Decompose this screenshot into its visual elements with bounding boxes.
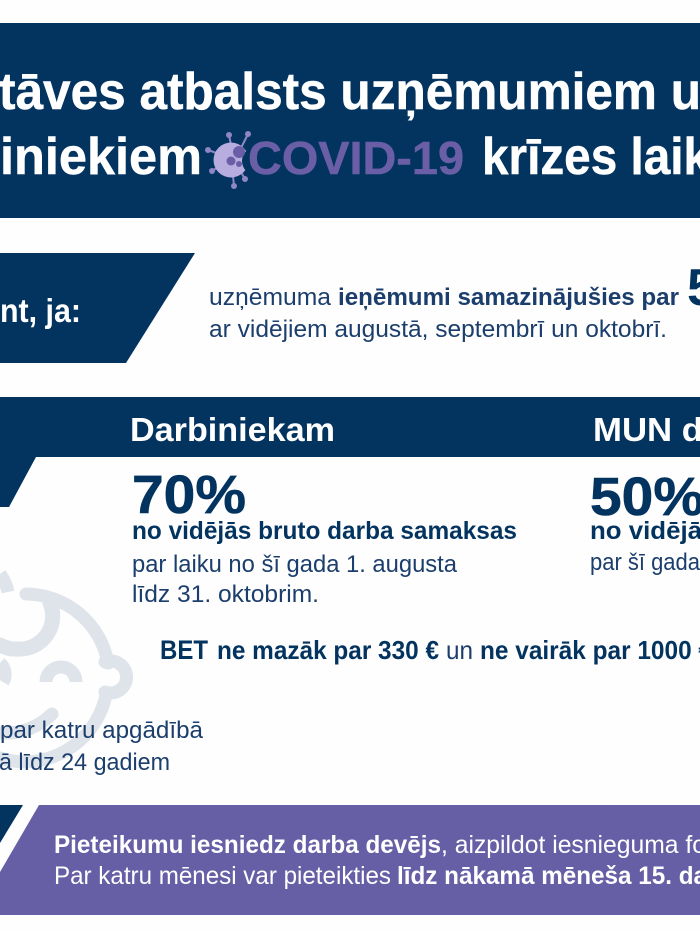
apply line 1 bold: Pieteikumu iesniedz darba devējs <box>54 831 441 859</box>
panel: support amounts <box>0 397 700 665</box>
condition text line 2: ar vidējiem augustā, septembrī un oktobrī. <box>209 316 667 343</box>
icon: baby face <box>0 574 127 762</box>
limits row: BET <box>160 635 208 665</box>
dependants note: par katru apgādībā <box>0 717 203 744</box>
condition bold text: ieņēmumi samazinājušies par <box>338 284 679 311</box>
dependants note: ā līdz 24 gadiem <box>0 749 170 776</box>
condition tag <box>0 253 195 363</box>
condition text line 1: uzņēmuma <box>209 284 332 311</box>
MUN percentage: 50% <box>590 467 700 527</box>
COVID-19 heading: COVID-19 <box>248 132 464 184</box>
employee percentage: 70% <box>132 465 246 525</box>
dependants note <box>0 717 203 776</box>
icon: virus <box>206 132 270 188</box>
column heading: MUN: MUN d <box>593 411 700 448</box>
MUN basis: no vidējā <box>590 517 700 545</box>
employee period: par laiku no šī gada 1. augusta <box>132 551 458 578</box>
column heading: employee: Darbiniekam <box>130 411 335 448</box>
header banner <box>0 23 700 218</box>
employee period end: līdz 31. oktobrim. <box>132 581 319 608</box>
panel: how to apply <box>0 805 700 915</box>
limits row: un <box>446 635 473 665</box>
condition tag label: nt, ja: <box>0 292 81 329</box>
panel: eligibility condition <box>0 253 700 363</box>
employee basis: no vidējās bruto darba samaksas <box>132 517 517 545</box>
limits row: ne mazāk par 330 € <box>217 635 439 665</box>
band header <box>0 397 700 507</box>
title line 2 start: iniekiem <box>0 128 202 186</box>
limits row <box>160 635 700 665</box>
corner accent <box>0 805 23 843</box>
apply line 2 regular: Par katru mēnesi var pieteikties <box>54 862 391 890</box>
